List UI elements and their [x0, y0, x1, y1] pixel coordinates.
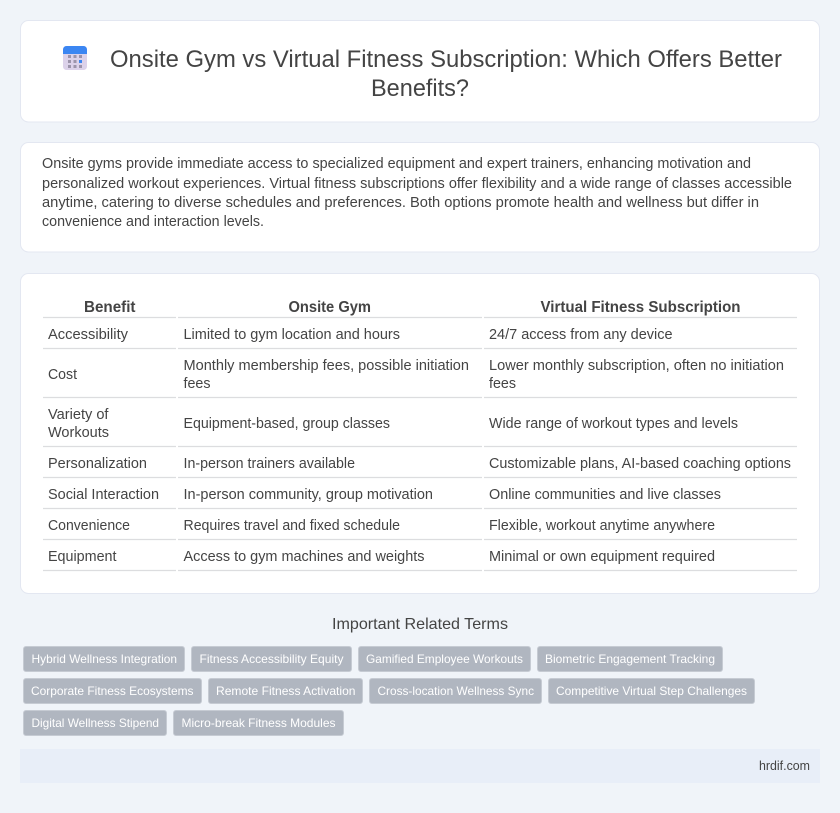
row: accessibility: Accessibility — [48, 327, 129, 343]
row: variety of workouts: Variety of — [48, 407, 109, 423]
tag group: related terms: Fitness Accessibility Equity — [200, 652, 344, 666]
tag group: related terms: Micro-break Fitness Modules — [182, 716, 336, 730]
row: variety of workouts: Wide range of workout types and levels — [489, 416, 738, 432]
row: variety of workouts: Workouts — [48, 425, 109, 441]
row: social interaction: Online communities and live classes — [489, 487, 721, 503]
row: personalization: Personalization — [48, 456, 147, 472]
row: variety of workouts — [48, 407, 738, 441]
table header row — [84, 299, 740, 316]
row: variety of workouts: Equipment-based, group classes — [184, 416, 390, 432]
title: Benefits? — [371, 75, 469, 102]
tag group: related terms: Corporate Fitness Ecosystems — [31, 684, 194, 698]
panel: summary paragraph — [20, 142, 820, 252]
row: equipment: Access to gym machines and weights — [184, 549, 424, 565]
tag group: related terms — [24, 646, 754, 736]
row: equipment: Minimal or own equipment required — [489, 549, 715, 565]
row: convenience: Convenience — [48, 518, 130, 534]
row: convenience: Requires travel and fixed schedule — [184, 518, 400, 534]
table header row: Benefit — [84, 299, 136, 316]
row: cost: Lower monthly subscription, often no initiation — [489, 358, 784, 374]
text block: summary: anytime, catering to diverse schedules and preferences. Both options promote health and wellness but differ in — [42, 195, 759, 211]
footer: hrdif.com — [759, 758, 810, 773]
row: accessibility: Limited to gym location and hours — [184, 327, 400, 343]
panel: comparison table — [20, 274, 820, 594]
row: convenience — [48, 518, 715, 534]
row: personalization: Customizable plans, AI-based coaching options — [489, 456, 791, 472]
icon: calendar — [63, 46, 87, 70]
tag group: related terms: Hybrid Wellness Integration — [32, 652, 177, 666]
row: accessibility — [48, 327, 672, 343]
row: social interaction: Social Interaction — [48, 487, 159, 503]
panel: title header — [20, 20, 820, 122]
row: cost: fees — [489, 376, 516, 392]
title — [110, 46, 782, 102]
row: personalization: In-person trainers available — [184, 456, 355, 472]
text block: summary: Onsite gyms provide immediate access to specialized equipment and expert trainers, enhancing motivation and — [42, 156, 751, 172]
tag group: related terms: Gamified Employee Workouts — [366, 652, 523, 666]
text block: summary: personalized workout experiences. Virtual fitness subscriptions offer flexibility and a wide range of classes accessible — [42, 176, 792, 192]
heading: important related terms: Important Related Terms — [332, 616, 508, 633]
tag group: related terms: Cross-location Wellness Sync — [378, 684, 534, 698]
text block: summary: convenience and interaction levels. — [42, 214, 264, 230]
tag group: related terms: Digital Wellness Stipend — [32, 716, 159, 730]
footer — [20, 749, 820, 783]
row: cost: Cost — [48, 367, 77, 383]
tag group: related terms: Biometric Engagement Tracking — [545, 652, 715, 666]
text block: summary — [42, 156, 792, 230]
row: social interaction: In-person community, group motivation — [184, 487, 433, 503]
tag group: related terms: Remote Fitness Activation — [216, 684, 356, 698]
table header row: Virtual Fitness Subscription — [540, 299, 740, 316]
table header row: Onsite Gym — [288, 299, 371, 316]
row: social interaction — [48, 487, 721, 503]
tag group: related terms: Competitive Virtual Step Challenges — [556, 684, 747, 698]
row: personalization — [48, 456, 791, 472]
row: equipment: Equipment — [48, 549, 116, 565]
row: cost: Monthly membership fees, possible initiation — [184, 358, 469, 374]
row: accessibility: 24/7 access from any device — [489, 327, 672, 343]
row: cost — [48, 358, 784, 392]
row: equipment — [48, 549, 715, 565]
row: convenience: Flexible, workout anytime anywhere — [489, 518, 715, 534]
row: cost: fees — [184, 376, 210, 392]
title: Onsite Gym vs Virtual Fitness Subscription: Which Offers Better — [110, 46, 782, 73]
